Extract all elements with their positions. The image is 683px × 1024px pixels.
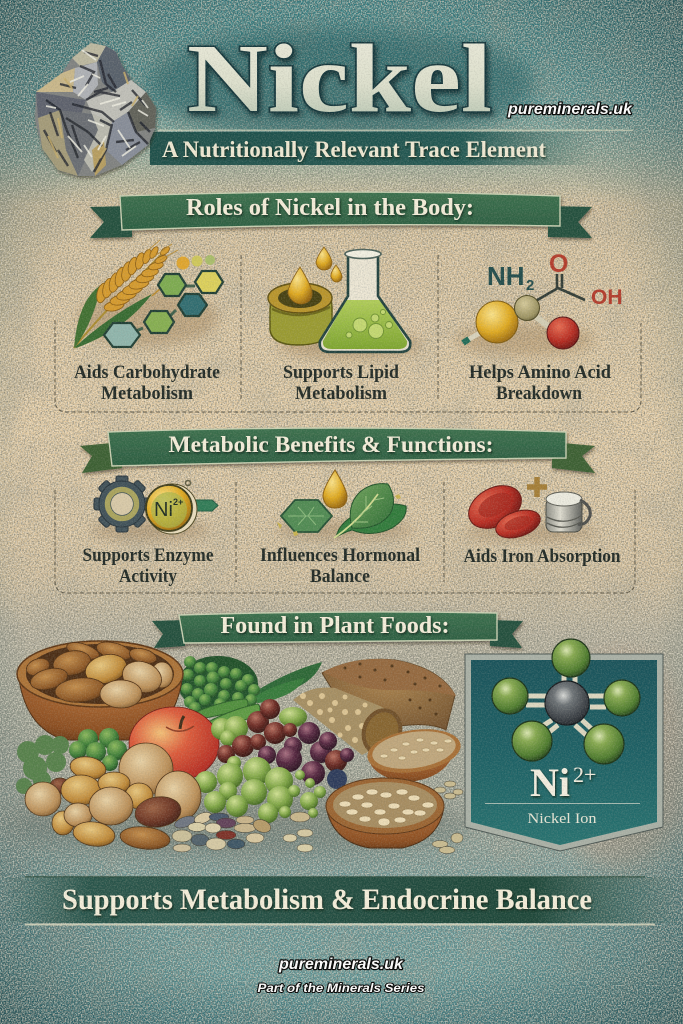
label: helps amino acid: Helps Amino Acid [469, 363, 612, 383]
footer website: pureminerals.uk [278, 956, 404, 973]
panel: roles of nickel [55, 192, 641, 412]
banner: roles of nickel: Roles of Nickel in the Body: [186, 195, 474, 221]
panel outline [55, 320, 641, 412]
food: light green grapes [211, 707, 307, 746]
food: bowl of nuts [17, 639, 183, 740]
banner: found in plant foods [152, 612, 523, 648]
food: breads [293, 659, 456, 761]
ion symbol: Ni [530, 760, 570, 805]
molecule: ni ion complex [492, 639, 640, 764]
icon: enzyme gear with Ni2+: 2+ [173, 497, 183, 507]
label: balance: Balance [310, 567, 370, 587]
banner: found in plant foods: Found in Plant Foods: [220, 613, 450, 639]
icon: oil mortar and flask [268, 247, 422, 359]
subtitle band [150, 130, 633, 165]
header [35, 25, 633, 176]
icon: wheat and carbohydrate chain [74, 240, 223, 348]
food: bowl of oats back [365, 724, 463, 782]
label: activity: Activity [119, 567, 178, 587]
banner: metabolic benefits: Metabolic Benefits & Functions: [168, 432, 494, 458]
icon: enzyme gear with Ni2+ [90, 476, 218, 540]
tagline: Supports Metabolism & Endocrine Balance [62, 884, 592, 916]
food: beans [172, 781, 463, 854]
food: bowl of oats front [326, 778, 444, 848]
title glow [145, 27, 535, 143]
panel: metabolic benefits [55, 428, 635, 593]
footer band [0, 876, 683, 926]
banner: metabolic benefits [80, 428, 595, 473]
illustration: plant foods [10, 639, 470, 857]
subtitle band: A Nutritionally Relevant Trace Element [162, 137, 546, 162]
icon: amino acid molecule: NH [487, 261, 525, 291]
icon: nickel ore rock [35, 43, 156, 176]
icon: hormone drop, hexagon and leaves [275, 470, 415, 539]
label: supports enzyme: Supports Enzyme [82, 546, 214, 566]
icon: amino acid molecule: OH [591, 286, 622, 309]
icon: red blood cells plus iron cylinder [461, 477, 598, 543]
icon: amino acid molecule: 2 [526, 277, 534, 294]
banner: roles of nickel [90, 192, 592, 238]
food: purple grapes [217, 699, 354, 789]
icon: amino acid molecule [455, 250, 622, 356]
label: metabolism (second column): Metabolism [295, 384, 388, 404]
icon: amino acid molecule: O [549, 250, 568, 278]
food: leaves and peas [178, 656, 322, 731]
food: apple [129, 707, 219, 781]
panel outline [55, 490, 635, 593]
footer series note: Part of the Minerals Series [258, 983, 424, 995]
website label: pureminerals.uk [507, 101, 633, 118]
label: aids carbohydrate metabolism: Aids Carbohydrate [74, 363, 220, 383]
label: supports lipid: Supports Lipid [283, 363, 400, 383]
label: influences hormonal: Influences Hormonal [260, 546, 420, 566]
food: parsley and green cluster [16, 728, 127, 794]
label: aids iron absorption: Aids Iron Absorption [464, 547, 621, 567]
panel: nickel ion badge [465, 639, 663, 851]
ground shadow [10, 793, 470, 857]
ion label: Nickel Ion [528, 811, 597, 827]
icon: enzyme gear with Ni2+: Ni [154, 499, 173, 521]
label: metabolism (first column): Metabolism [101, 384, 194, 404]
title: Nickel: Nickel [187, 25, 492, 132]
ion charge: 2+ [573, 762, 596, 787]
label: breakdown: Breakdown [496, 384, 583, 404]
food: green grapes [195, 756, 326, 823]
food: mixed nuts front [25, 743, 201, 852]
